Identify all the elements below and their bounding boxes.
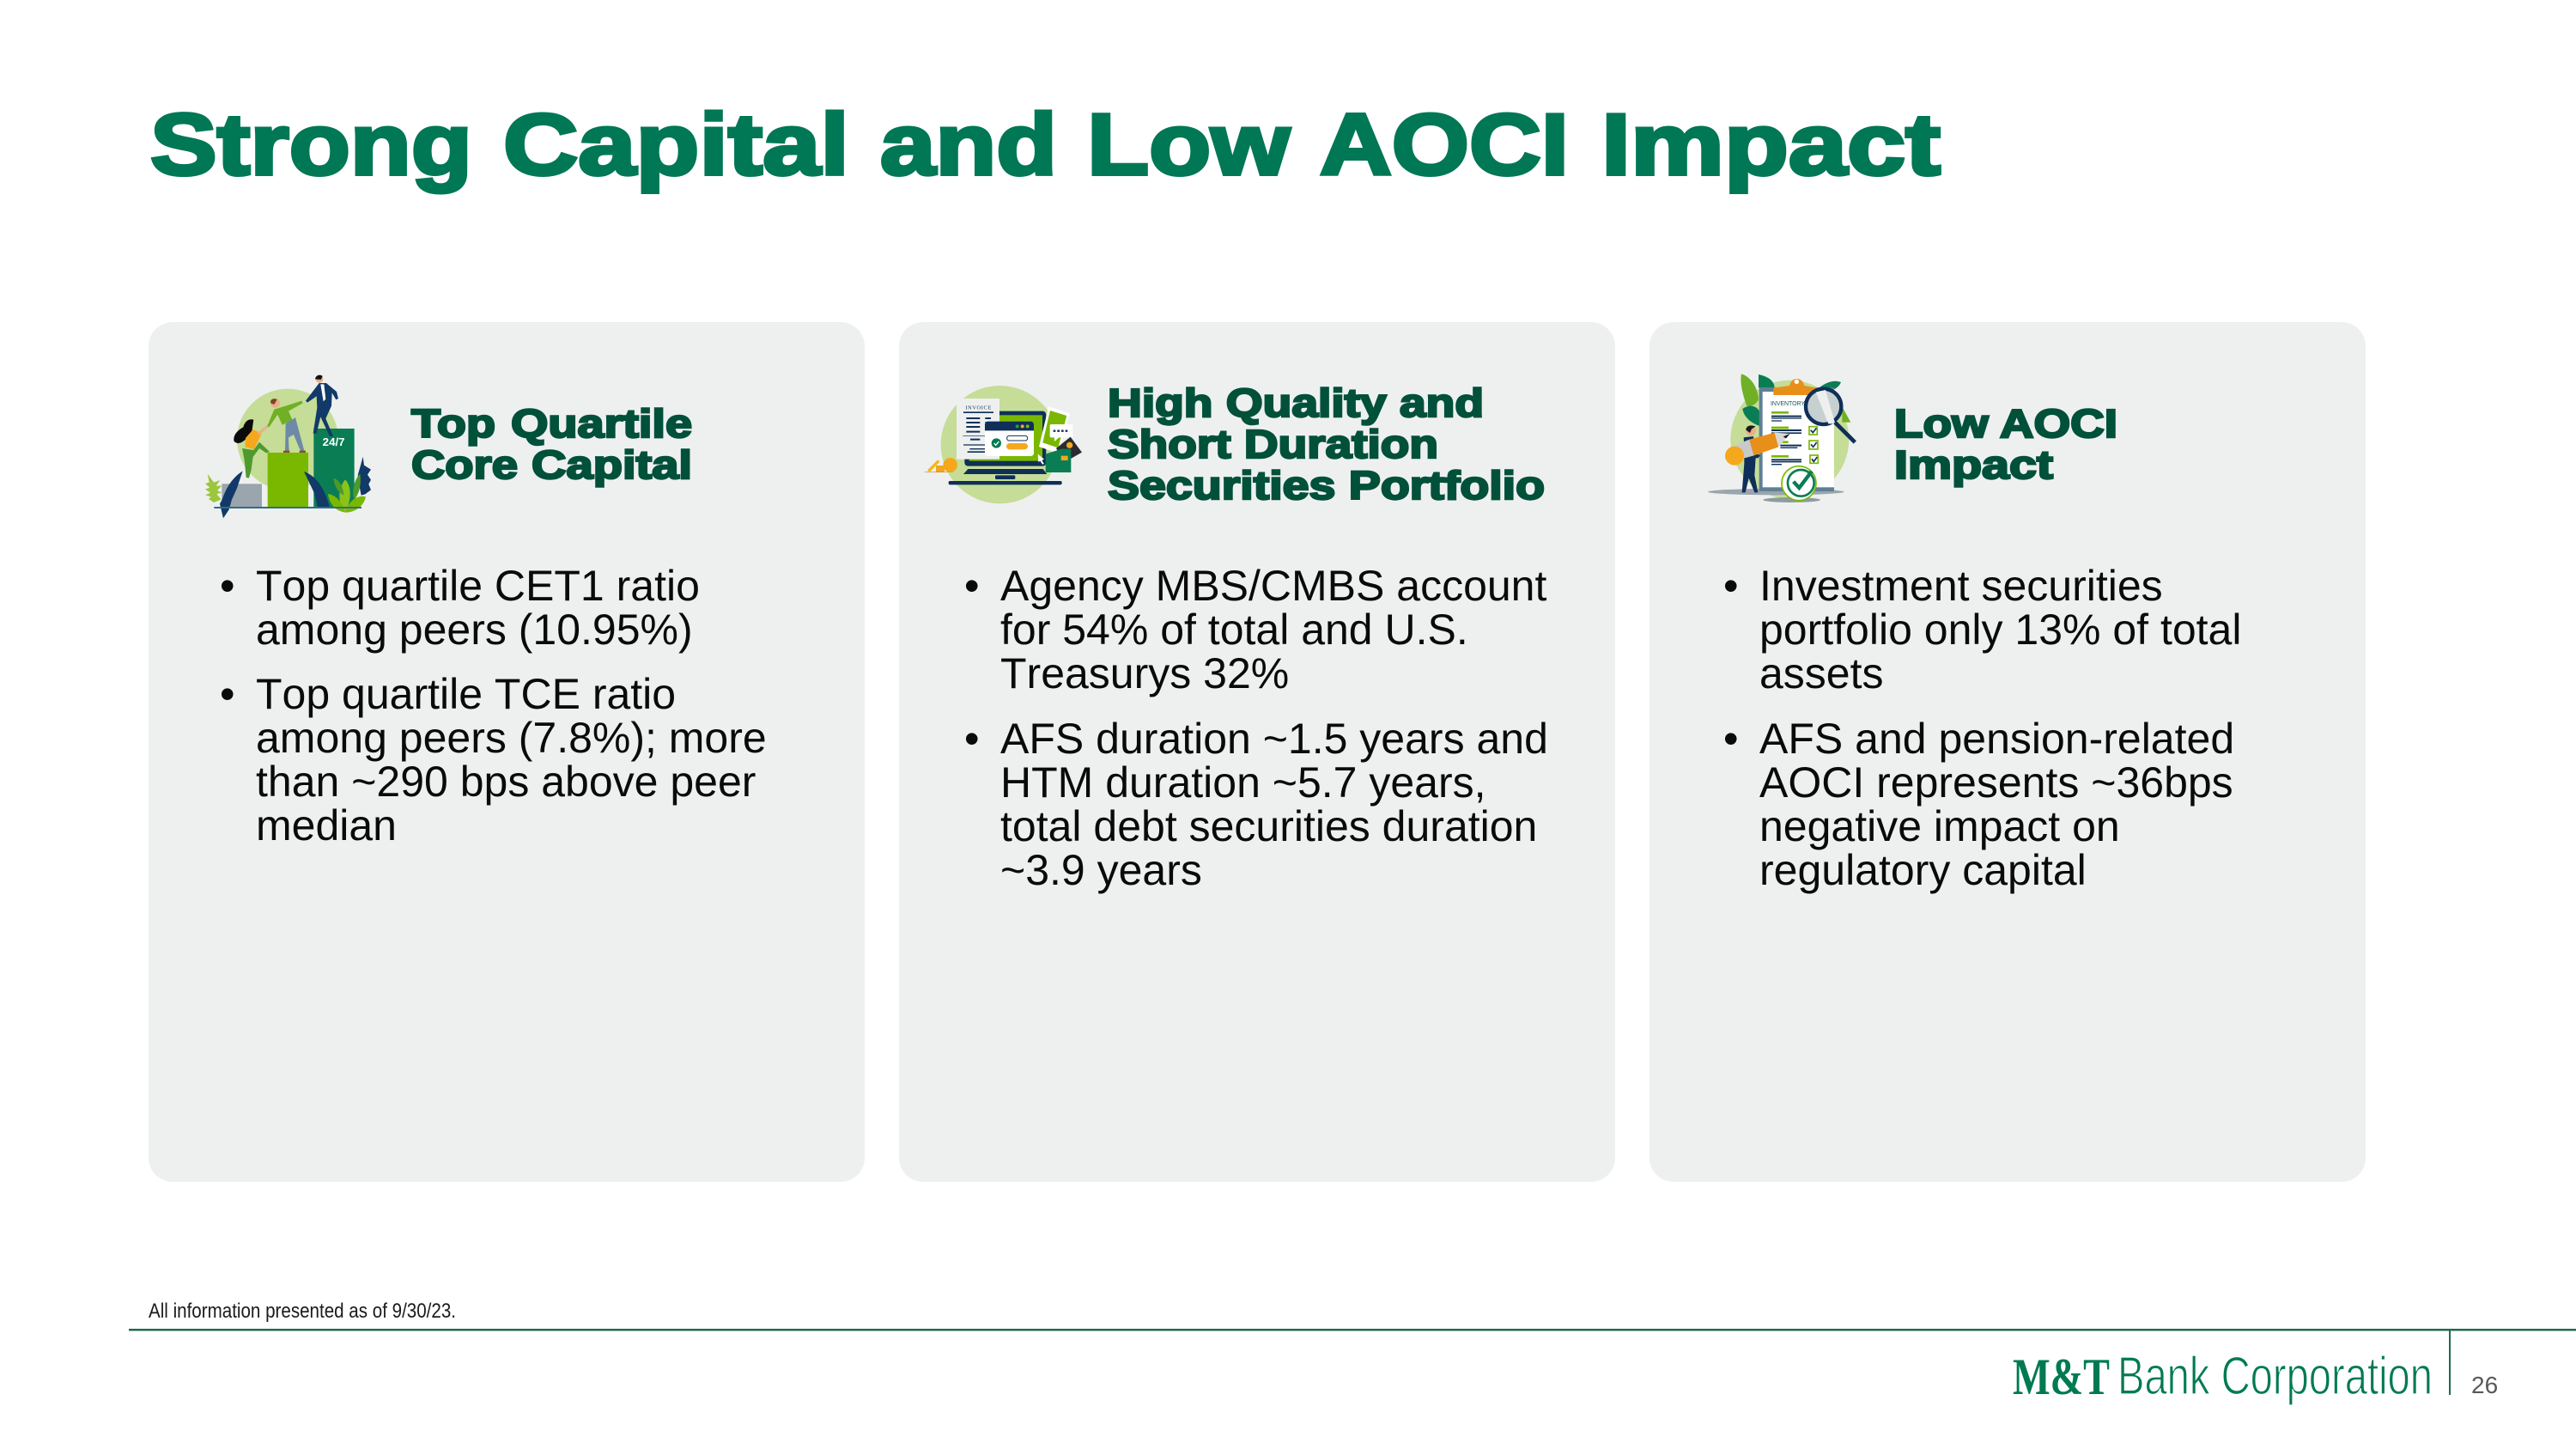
title: AOCI (1320, 97, 1569, 193)
icon: people climbing podium: 24/7 (323, 435, 345, 448)
bullet list: median (256, 801, 397, 849)
heading: Short Duration (1108, 422, 1438, 466)
icon: laptop with invoice (925, 386, 1082, 503)
icon: laptop with invoice: INVOICE (965, 405, 991, 411)
bullet list: Agency MBS/CMBS account (1000, 562, 1546, 610)
bullet list: • (220, 562, 235, 610)
title (150, 97, 1941, 193)
bullet list: regulatory capital (1759, 846, 2087, 894)
icon: inventory clipboard: INVENTORY (1771, 401, 1805, 407)
heading: Top (411, 401, 495, 446)
bullet list: AFS and pension-related (1759, 715, 2234, 763)
heading: Core (411, 442, 518, 487)
page number: 26 (2471, 1372, 2498, 1398)
logo (2013, 1347, 2433, 1406)
heading (411, 401, 692, 487)
heading: High Quality and (1108, 381, 1484, 425)
bullet list: Top quartile TCE ratio (256, 670, 676, 718)
bullet list: • (1723, 562, 1739, 610)
bullet list: among peers (7.8%); more (256, 714, 767, 762)
title: Strong (150, 97, 472, 193)
heading: Quartile (511, 401, 692, 446)
heading: Impact (1894, 442, 2053, 487)
heading: Low AOCI (1894, 401, 2117, 446)
title: Impact (1601, 97, 1941, 193)
bullet list (964, 562, 1548, 894)
bullet list: portfolio only 13% of total (1759, 606, 2241, 654)
bullet list: AFS duration ~1.5 years and (1000, 715, 1548, 763)
bullet list (1723, 562, 2241, 894)
bullet list: • (220, 670, 235, 718)
logo: Bank Corporation (2117, 1347, 2433, 1406)
heading (1108, 381, 1545, 508)
logo: M&T (2013, 1349, 2110, 1405)
bullet list: assets (1759, 649, 1884, 697)
bullet list: for 54% of total and U.S. (1000, 606, 1468, 654)
footnote: All information presented as of 9/30/23. (149, 1300, 456, 1323)
panel: top quartile core capital (149, 322, 865, 1182)
icon: inventory clipboard (1708, 374, 1856, 502)
title: and (880, 97, 1057, 193)
man navy (316, 375, 323, 383)
bullet list: than ~290 bps above peer (256, 758, 756, 806)
icon: people climbing podium (205, 375, 371, 518)
bullet list: total debt securities duration (1000, 802, 1537, 850)
bullet list: • (964, 562, 980, 610)
bullet list: Investment securities (1759, 562, 2163, 610)
heading: Capital (532, 442, 692, 487)
heading (1894, 401, 2117, 487)
woman (234, 419, 253, 443)
title: Capital (503, 97, 849, 193)
bullet list: HTM duration ~5.7 years, (1000, 758, 1486, 807)
bullet list: negative impact on (1759, 802, 2120, 850)
heading: Securities Portfolio (1108, 463, 1545, 508)
bullet list: • (964, 715, 980, 763)
bullet list: Top quartile CET1 ratio (256, 562, 700, 610)
title: Low (1087, 97, 1291, 193)
bullet list: Treasurys 32% (1000, 649, 1289, 697)
bullet list (220, 562, 767, 849)
panel: securities portfolio (899, 322, 1615, 1182)
man green (270, 399, 280, 408)
bullet list: among peers (10.95%) (256, 606, 693, 654)
panel: low AOCI impact (1649, 322, 2366, 1182)
bullet list: • (1723, 715, 1739, 763)
bullet list: ~3.9 years (1000, 846, 1202, 894)
bullet list: AOCI represents ~36bps (1759, 758, 2233, 807)
